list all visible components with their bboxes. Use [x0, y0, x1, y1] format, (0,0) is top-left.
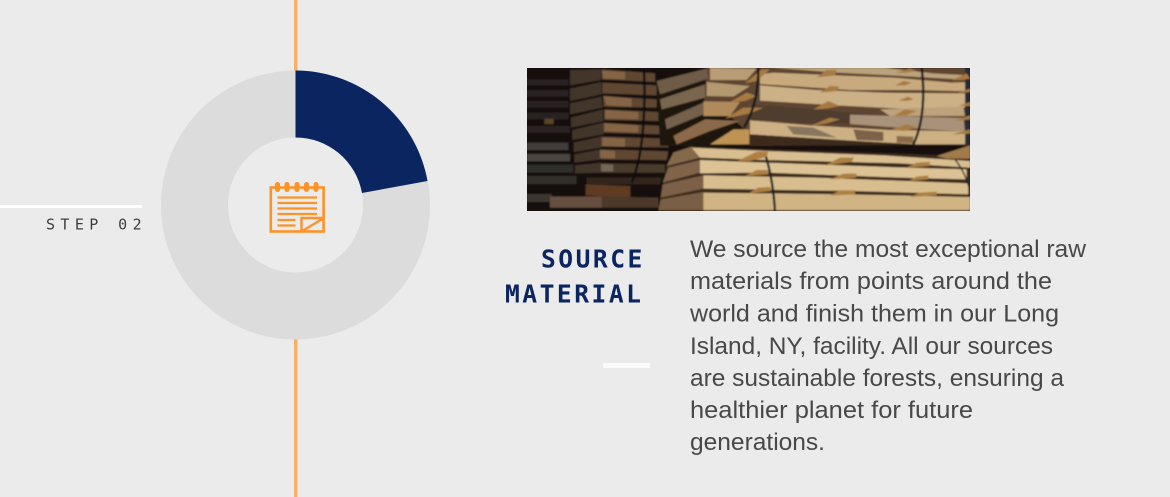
donut track	[194, 104, 396, 306]
body paragraph: healthier planet for future	[690, 397, 973, 424]
body paragraph: materials from points around the	[690, 268, 1052, 295]
slab faces	[710, 68, 757, 80]
body paragraph: are sustainable forests, ensuring a	[690, 365, 1065, 392]
heading rule	[603, 363, 650, 368]
sticks	[725, 69, 970, 134]
vertical timeline line	[294, 0, 298, 497]
step label: STEP 02	[46, 216, 147, 234]
upper right stack	[657, 68, 970, 146]
donut progress segment	[296, 70, 428, 193]
heading: source material: SOURCE	[541, 244, 645, 274]
bark ends	[657, 69, 708, 94]
far left and middle dark stacks	[527, 69, 668, 208]
progress donut	[194, 70, 428, 306]
heading: source material	[505, 244, 645, 308]
lower right stack	[658, 145, 970, 213]
body paragraph: world and finish them in our Long	[689, 300, 1059, 328]
icon: notepad	[271, 184, 324, 232]
body paragraph: generations.	[690, 429, 825, 456]
slab backing	[703, 68, 965, 134]
photo: stacked timber	[527, 68, 970, 211]
heading: source material: MATERIAL	[505, 280, 643, 308]
body paragraph	[689, 236, 1087, 456]
step rule	[0, 205, 142, 208]
body paragraph: Island, NY, facility. All our sources	[690, 333, 1053, 360]
body paragraph: We source the most exceptional raw	[690, 236, 1087, 263]
